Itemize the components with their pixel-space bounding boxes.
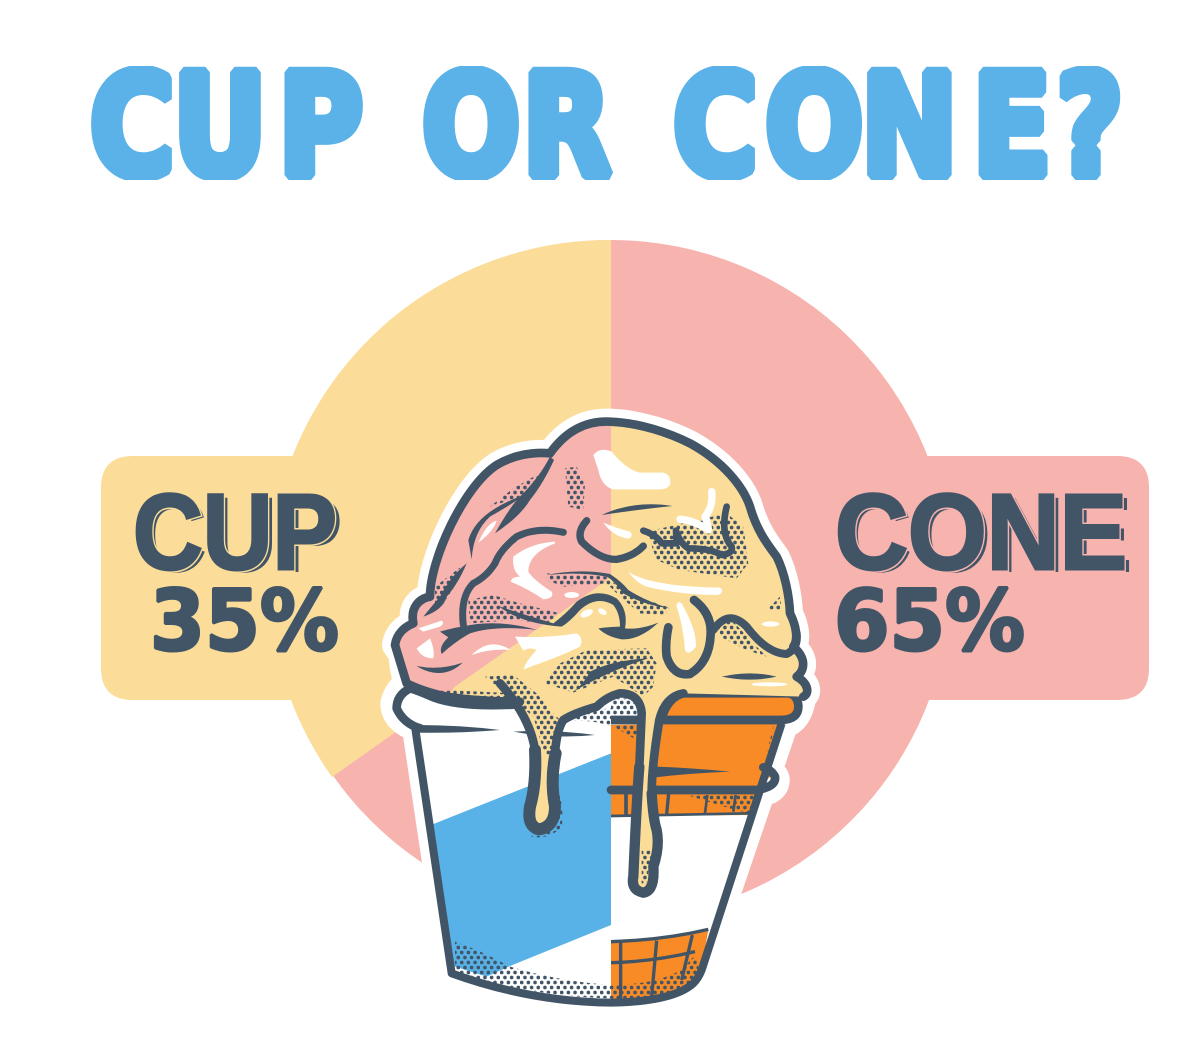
cone upper orange (611, 724, 778, 816)
cone band grid (611, 793, 750, 816)
right drip heavy outline (633, 767, 658, 893)
pie chart: cup 35%, cone 65% (269, 240, 951, 920)
cup and cone body (397, 688, 798, 1003)
cup label: CUP (133, 471, 337, 592)
cone label: CONE (835, 471, 1127, 592)
cup rim halftone (565, 708, 611, 726)
scoop outline (395, 422, 807, 893)
ice cream scoop fill with melting drips (395, 422, 807, 893)
cone label: CONE (835, 471, 1127, 592)
waffle grid (611, 929, 708, 1000)
cone rim (611, 693, 798, 779)
cup percentage: 35% (150, 572, 339, 670)
left drip heavy outline (529, 750, 556, 829)
blue stripe on cup (413, 753, 611, 977)
pie slice: cone 65% (271, 240, 951, 920)
cup body outline (415, 723, 782, 1003)
scoop inner stroked contours (463, 507, 797, 674)
cup label: CUP (133, 471, 337, 592)
cone halftone (611, 725, 775, 1003)
scoop white highlights (417, 450, 787, 686)
scoop inner filled contours (417, 457, 777, 693)
scoop halftone shading (433, 467, 782, 883)
drip halftone on blue (530, 780, 562, 837)
cup bottom halftone (455, 942, 611, 998)
panel: cup label bar (101, 456, 400, 700)
cup rim outline (397, 688, 523, 728)
cone waffle tip (611, 930, 708, 1003)
cup rim shadow lines (417, 725, 595, 737)
title: CUP OR CONE? (90, 45, 1123, 209)
cup body fill (415, 723, 782, 1003)
white halo (393, 422, 807, 1003)
panel: cone label bar (800, 456, 1149, 700)
illustration: half cup half cone with melting ice cream (393, 422, 807, 1003)
pie slice: cup 35% (269, 240, 611, 777)
cone rim outline (611, 693, 798, 720)
cup rim (397, 688, 611, 731)
cone percentage: 65% (834, 572, 1025, 670)
pink flavour half (395, 422, 611, 697)
cup label: CUP (137, 474, 343, 595)
white highlight squiggle (680, 492, 712, 530)
cone lower rim outline (611, 767, 775, 790)
cone label: CONE (839, 474, 1133, 595)
cone inner crease (655, 767, 730, 777)
